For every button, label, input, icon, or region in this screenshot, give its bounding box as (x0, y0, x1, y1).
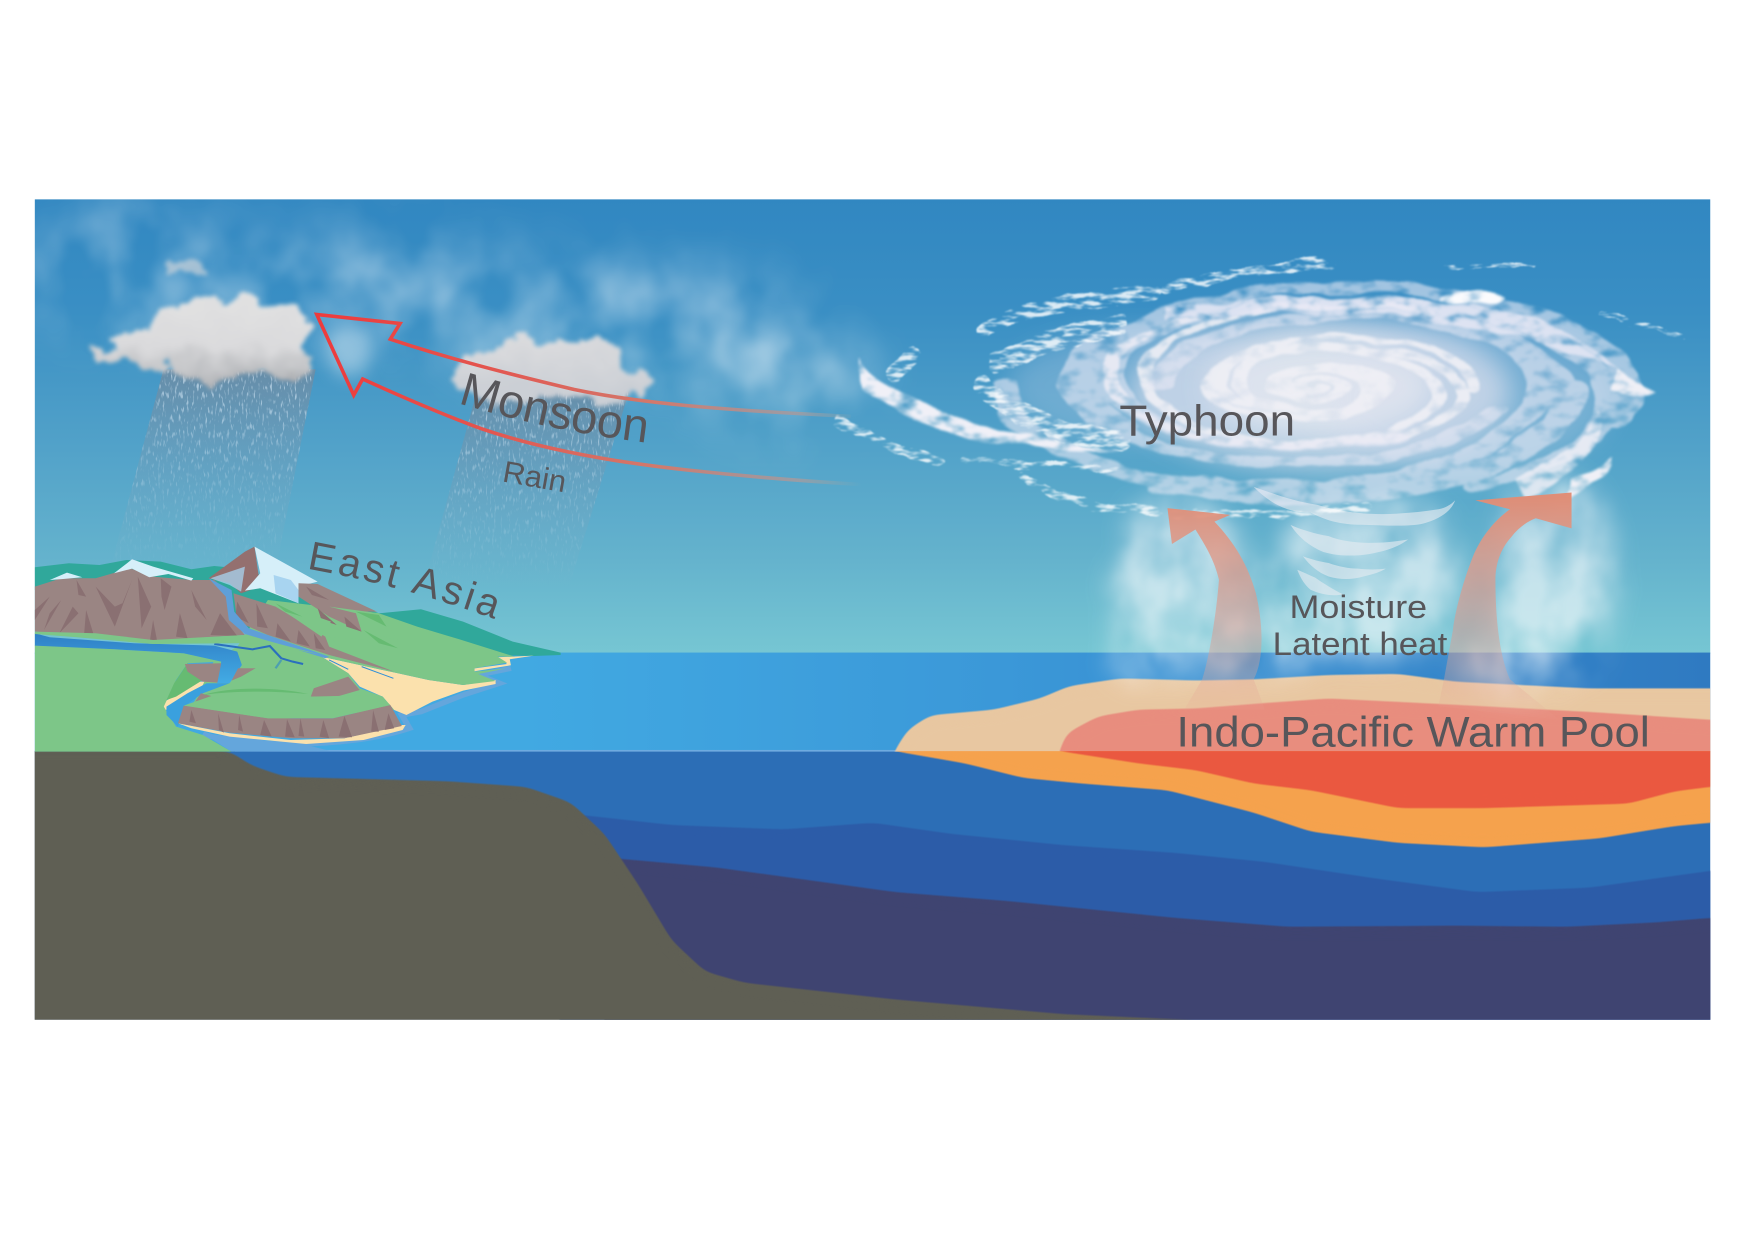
plateau highlight (203, 689, 308, 695)
label: East Asia: East Asia (310, 542, 497, 619)
label: Rain: Rain (500, 456, 569, 499)
typhoon funnel crescents (1254, 487, 1455, 595)
main peak rock (209, 547, 260, 593)
plateau cliff streaks (189, 710, 394, 738)
warm pool: orange subsurface layer (896, 751, 1710, 848)
red outline arrow: monsoon flow (317, 315, 864, 485)
label: Moisture: Moisture (1289, 589, 1427, 625)
small glacier left of peak (210, 567, 245, 592)
cloud: small puff (165, 260, 205, 273)
darker ridge highlights (276, 603, 398, 648)
darker green patch (166, 663, 203, 700)
typhoon ragged wisps (838, 262, 1685, 515)
typhoon base disk (1007, 313, 1612, 473)
ocean layer: intermediate water (559, 816, 1710, 1020)
label: Typhoon: Typhoon (1119, 396, 1295, 445)
warm pool: pink layer above surface (1059, 698, 1710, 752)
seabed and continental shelf (34, 750, 1190, 1020)
cloud: right rain cloud (460, 338, 651, 401)
cloud: left rain cloud (96, 298, 313, 383)
distant teal hills (35, 560, 561, 656)
ocean layer: deep water (604, 858, 1710, 1020)
tributaries (214, 644, 393, 678)
cliff streaks (235, 587, 362, 650)
ocean layer: upper water (35, 751, 1710, 1020)
glacier shadow (274, 575, 299, 603)
eastern ridge cliffs (233, 593, 394, 672)
rising vapour plumes (1114, 470, 1617, 694)
typhoon white cloud blob (1439, 291, 1507, 304)
cloud: haze beside arrow head (327, 322, 372, 376)
warm pool: red core (1060, 751, 1710, 809)
main peak snow (245, 547, 318, 603)
label: Monsoon: Monsoon (461, 373, 646, 442)
snow caps on range (50, 559, 193, 581)
mountain streaks (35, 577, 237, 640)
river estuary (166, 683, 230, 727)
typhoon spiral arms (992, 278, 1646, 508)
sky background (35, 199, 1710, 654)
main river (35, 633, 242, 683)
rain shaft: left (120, 369, 316, 551)
plateau cliff (178, 705, 402, 738)
range base green strip (35, 632, 321, 655)
green slopes on ridge (268, 600, 398, 667)
warm pool: tan layer above surface (894, 673, 1710, 752)
label: Latent heat: Latent heat (1273, 626, 1447, 662)
label: Indo-Pacific Warm Pool: Indo-Pacific Warm Pool (1176, 709, 1650, 757)
illustration: ocean-atmosphere cross-section (34, 199, 1710, 1020)
glacial river (209, 578, 329, 658)
mountain range (35, 568, 245, 641)
plateau top (184, 687, 390, 718)
central green lowland (191, 600, 515, 720)
arrow: left moisture flux (1167, 508, 1265, 710)
typhoon outer rain bands (855, 297, 1654, 498)
river bank cliffs (185, 663, 360, 702)
arrow: right moisture flux (1438, 493, 1572, 720)
rain shaft: right (434, 392, 628, 570)
coastal shallow water (203, 668, 511, 752)
land: East Asia landscape (35, 547, 561, 752)
sea surface band (35, 653, 1710, 752)
thin surface highlight (235, 750, 907, 752)
front left green plain (35, 645, 232, 752)
beach sand (163, 656, 534, 744)
high cirrus cloud veil (22, 207, 867, 431)
